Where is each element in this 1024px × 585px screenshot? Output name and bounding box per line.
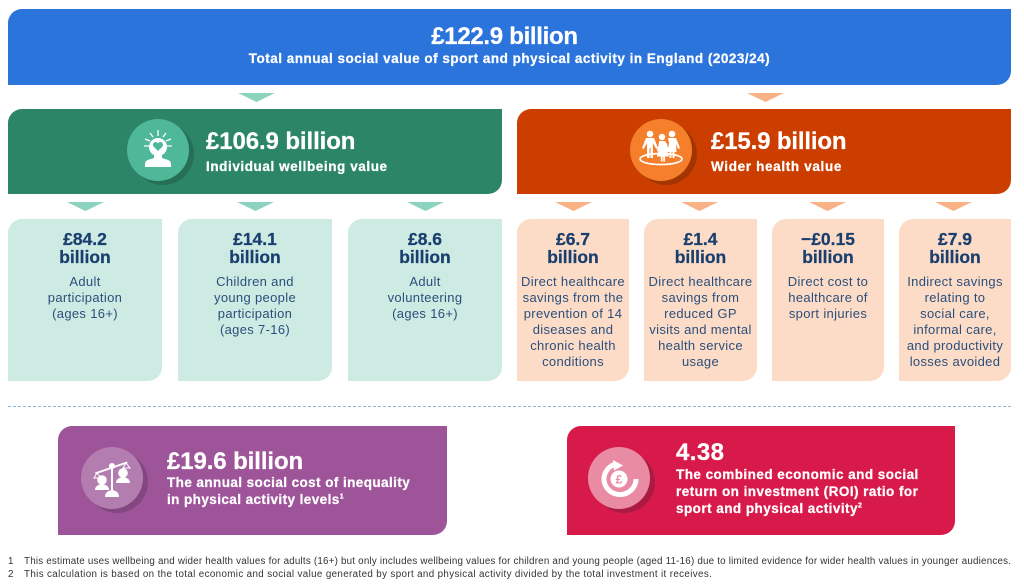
wider health heading: £15.9 billion xyxy=(711,128,846,155)
card: adult participation: (ages 16+) xyxy=(52,306,118,321)
card: indirect savings xyxy=(899,219,1011,381)
card: GP and mental health savings: savings from xyxy=(662,290,739,305)
arrow: total to wider health xyxy=(747,93,784,102)
card: direct healthcare savings: chronic health xyxy=(530,338,616,353)
footnotes xyxy=(8,556,1011,580)
card: children and young people: participation xyxy=(218,306,292,321)
icon: pound with circular arrow: £ xyxy=(616,472,623,486)
card: adult participation: Adult xyxy=(69,274,101,289)
ROI heading: 4.38 xyxy=(676,439,724,466)
card: sport injuries cost: billion xyxy=(802,247,854,267)
arrow: to children participation xyxy=(237,202,274,211)
arrow: to GP savings xyxy=(681,202,718,211)
card: GP and mental health savings: visits and mental xyxy=(649,322,752,337)
card: adult volunteering: £8.6 xyxy=(408,229,442,249)
arrow: total to wellbeing xyxy=(238,93,275,102)
card: direct healthcare savings: billion xyxy=(547,247,599,267)
panel: total social value xyxy=(8,9,1011,85)
card: direct healthcare savings: prevention of 14 xyxy=(524,306,622,321)
total value subtitle: Total annual social value of sport and physical activity in England (2023/24) xyxy=(249,51,770,66)
total value heading: £122.9 billion xyxy=(431,23,578,50)
card: GP and mental health savings: usage xyxy=(682,354,719,369)
icon: group of people xyxy=(630,119,697,185)
card: GP and mental health savings xyxy=(644,219,757,381)
card: direct healthcare savings: savings from the xyxy=(523,290,623,305)
card: children and young people: (ages 7-16) xyxy=(220,322,290,337)
card: direct healthcare savings xyxy=(517,219,629,381)
ROI description: sport and physical activity2 xyxy=(676,501,862,516)
ROI description: return on investment (ROI) ratio for xyxy=(676,484,918,499)
card: indirect savings: relating to xyxy=(925,290,985,305)
card: children and young people: Children and xyxy=(216,274,294,289)
card: sport injuries cost: Direct cost to xyxy=(788,274,868,289)
icon: person with heart xyxy=(127,119,194,185)
card: adult volunteering: billion xyxy=(399,247,451,267)
card: direct healthcare savings: £6.7 xyxy=(556,229,590,249)
wellbeing value heading: £106.9 billion xyxy=(206,128,355,155)
card: children and young people: billion xyxy=(229,247,281,267)
panel: return on investment xyxy=(567,426,955,535)
card: direct healthcare savings: Direct healthcare xyxy=(521,274,625,289)
card: adult participation: £84.2 xyxy=(63,229,107,249)
inequality description: in physical activity levels1 xyxy=(167,492,344,507)
footnote 1: 1 xyxy=(8,556,13,567)
ROI description: The combined economic and social xyxy=(676,467,919,482)
arrow: to indirect savings xyxy=(935,202,972,211)
card: indirect savings: losses avoided xyxy=(910,354,1000,369)
card: indirect savings: social care, xyxy=(920,306,990,321)
card: children and young people: £14.1 xyxy=(233,229,277,249)
inequality heading: £19.6 billion xyxy=(167,448,303,475)
card: sport injuries cost xyxy=(772,219,884,381)
card: indirect savings: Indirect savings xyxy=(907,274,1003,289)
card: indirect savings: informal care, xyxy=(913,322,997,337)
arrow: to direct healthcare savings xyxy=(555,202,592,211)
card: adult volunteering: (ages 16+) xyxy=(392,306,458,321)
card: sport injuries cost: healthcare of xyxy=(788,290,868,305)
card: sport injuries cost: −£0.15 xyxy=(801,229,855,249)
card: indirect savings: £7.9 xyxy=(938,229,972,249)
inequality description: The annual social cost of inequality xyxy=(167,475,410,490)
card: adult volunteering xyxy=(348,219,502,381)
card: adult volunteering: volunteering xyxy=(388,290,462,305)
card: indirect savings: and productivity xyxy=(907,338,1003,353)
card: direct healthcare savings: diseases and xyxy=(533,322,613,337)
card: adult participation xyxy=(8,219,162,381)
card: GP and mental health savings: reduced GP xyxy=(664,306,737,321)
card: GP and mental health savings: billion xyxy=(675,247,726,267)
inequality description xyxy=(167,475,410,508)
footnote 1: This estimate uses wellbeing and wider health values for adults (16+) but only includes wellbeing values for children and young people (aged 11-16) due to limited evidence for wider health values in younger audiences. xyxy=(24,556,1011,567)
icon: pound with circular arrow xyxy=(588,447,655,513)
card: adult participation: participation xyxy=(48,290,122,305)
card: sport injuries cost: sport injuries xyxy=(789,306,867,321)
icon: balance scale with people xyxy=(81,447,148,513)
card: direct healthcare savings: conditions xyxy=(542,354,604,369)
panel: individual wellbeing value xyxy=(8,109,502,194)
panel: cost of inequality xyxy=(58,426,447,535)
card: GP and mental health savings: health service xyxy=(658,338,743,353)
wider health subtitle: Wider health value xyxy=(711,159,842,174)
card: indirect savings: billion xyxy=(929,247,981,267)
card: children and young people: young people xyxy=(214,290,296,305)
ROI description xyxy=(676,467,919,516)
wellbeing value subtitle: Individual wellbeing value xyxy=(206,159,388,174)
arrow: to adult volunteering xyxy=(407,202,444,211)
card: adult volunteering: Adult xyxy=(409,274,441,289)
card: GP and mental health savings: Direct healthcare xyxy=(649,274,752,289)
arrow: to injury cost xyxy=(809,202,846,211)
panel: wider health value xyxy=(517,109,1011,194)
arrow: to adult participation xyxy=(67,202,104,211)
footnote 2: This calculation is based on the total economic and social value generated by sport and physical activity divided by the total investment it receives. xyxy=(24,569,712,580)
footnote 2: 2 xyxy=(8,569,13,580)
card: adult participation: billion xyxy=(59,247,111,267)
card: children and young people xyxy=(178,219,332,381)
card: GP and mental health savings: £1.4 xyxy=(683,229,718,249)
